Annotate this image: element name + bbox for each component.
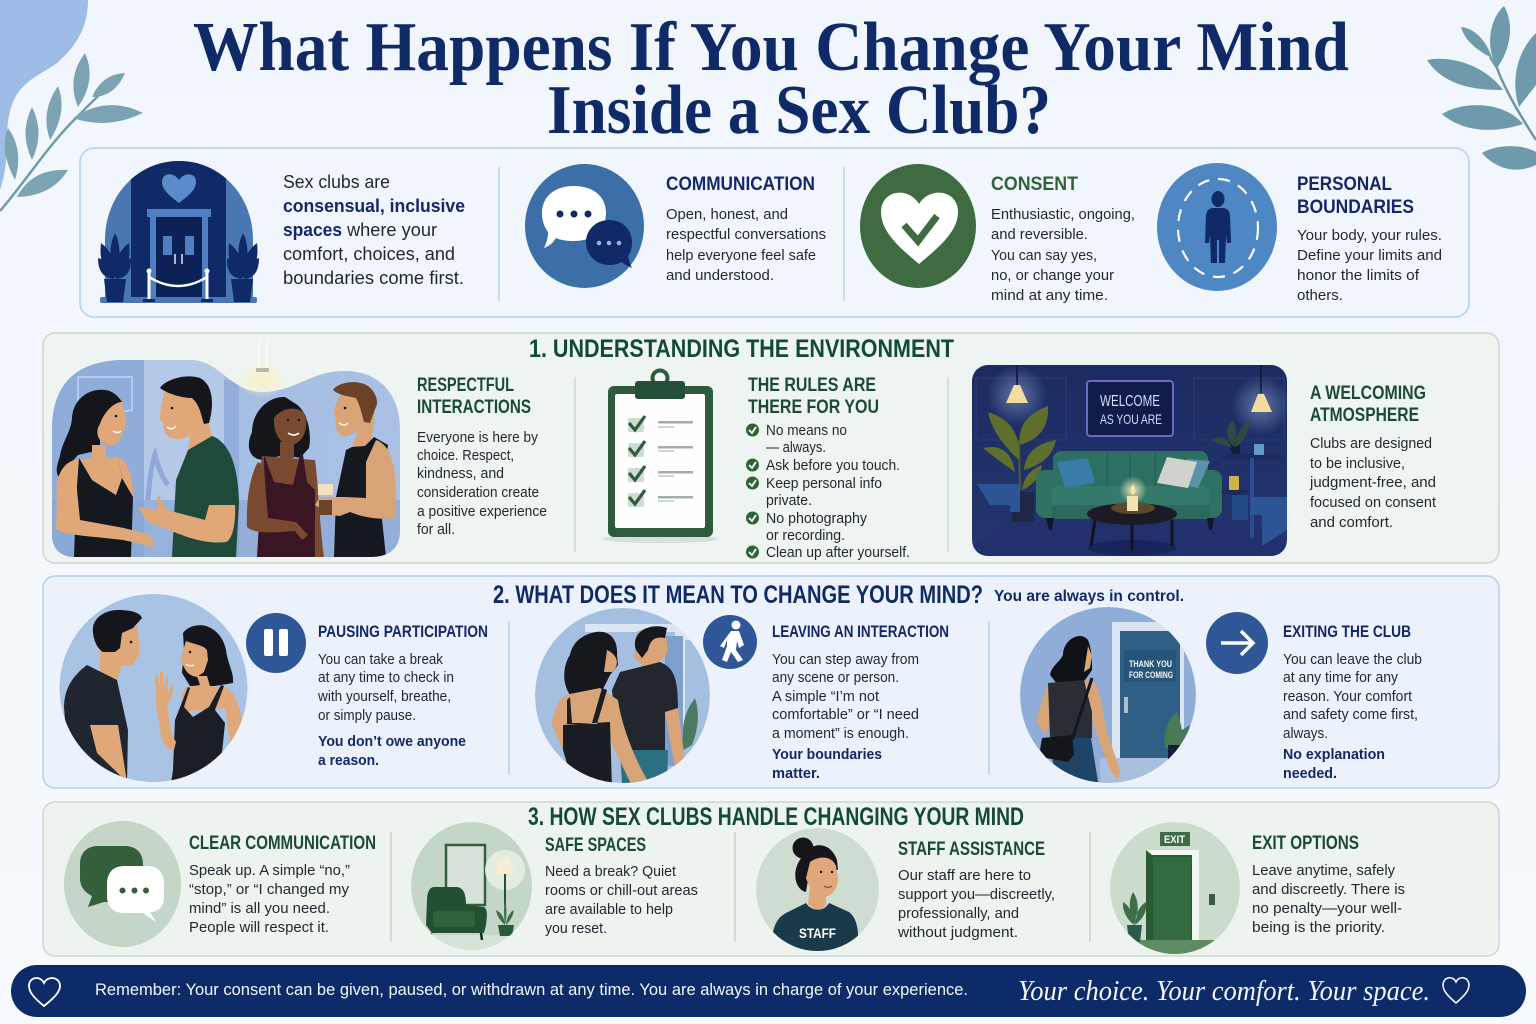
icon: heart left	[29, 978, 60, 1006]
text: the rules are there for you: Ask before you touch.	[766, 458, 900, 474]
text: personal boundaries: others.	[1297, 288, 1343, 304]
text: leaving an interaction	[772, 623, 949, 782]
leaf branch left	[0, 53, 143, 211]
text: staff assistance: professionally, and	[898, 906, 1019, 922]
text: communication: and understood.	[666, 268, 774, 284]
text: the rules are there for you: THE RULES ARE	[748, 374, 876, 396]
intro text: consensual, inclusive	[283, 195, 465, 216]
text: pausing participation: a reason.	[318, 753, 379, 769]
icon: walking person	[703, 615, 757, 669]
banner: reminder	[11, 965, 1526, 1017]
title: What Happens If You Change Your Mind	[193, 9, 1349, 86]
text: consent	[991, 173, 1135, 304]
illustration: exiting the club: FOR COMING	[1129, 670, 1173, 681]
chair left	[977, 484, 1020, 512]
illustration: leaving an interaction	[535, 608, 710, 790]
script tagline: Your choice. Your comfort. Your space.	[1018, 975, 1430, 1007]
woman right	[249, 397, 310, 460]
text: staff assistance: STAFF ASSISTANCE	[898, 838, 1045, 860]
text: pausing participation: You don’t owe anyone	[318, 734, 466, 750]
text: leaving an interaction: LEAVING AN INTERACTION	[772, 623, 949, 641]
table and candle	[1087, 476, 1177, 556]
text: communication: Open, honest, and	[666, 207, 788, 223]
illustration: pausing	[60, 594, 248, 790]
reminder text: Remember: Your consent can be given, paused, or withdrawn at any time. You are always in charge of your experience.	[95, 980, 968, 999]
text: exit options: and discreetly. There is	[1252, 882, 1405, 898]
text: clear communication: People will respect it.	[189, 920, 329, 936]
text: exiting the club: You can leave the club	[1283, 652, 1422, 668]
panel: section 1 understanding the environment	[43, 333, 1499, 563]
text: personal boundaries: Your body, your rules.	[1297, 228, 1442, 244]
text: respectful interactions: a positive experience	[417, 504, 547, 520]
text: personal boundaries: Define your limits and	[1297, 248, 1442, 264]
panel: introduction and key concepts	[80, 148, 1469, 317]
text: the rules are there for you: THERE FOR YOU	[748, 396, 879, 418]
text: the rules are there for you	[746, 374, 910, 561]
text: consent: mind at any time.	[991, 288, 1108, 304]
decorative blue blob top left	[0, 0, 88, 190]
text: leaving an interaction: comfortable” or “I need	[772, 707, 919, 723]
woman left	[57, 390, 122, 477]
icon: club entrance	[98, 161, 259, 303]
text: pausing participation	[317, 623, 488, 769]
text: leaving an interaction: You can step away from	[772, 652, 919, 668]
icon: heart right	[1443, 978, 1469, 1003]
text: leaving an interaction: any scene or person.	[772, 670, 899, 686]
text: safe spaces: Need a break? Quiet	[545, 864, 676, 880]
text: leaving an interaction: Your boundaries	[772, 747, 882, 763]
text: consent: no, or change your	[991, 268, 1114, 284]
text: personal boundaries	[1297, 173, 1442, 304]
illustration: welcoming lounge	[972, 365, 1291, 556]
illustration: exiting the club: THANK YOU	[1129, 659, 1172, 670]
icon: consent heart	[860, 164, 976, 288]
illustration: staff member	[756, 828, 879, 951]
text: a welcoming atmosphere: Clubs are designed	[1310, 436, 1432, 452]
icon: personal boundaries	[1157, 163, 1277, 291]
text: a welcoming atmosphere: to be inclusive,	[1310, 456, 1405, 472]
text: safe spaces: are available to help	[545, 902, 673, 918]
text: personal boundaries: honor the limits of	[1297, 268, 1420, 284]
text: exiting the club: and safety come first,	[1283, 707, 1418, 723]
heading: section 1: 1. UNDERSTANDING THE ENVIRONMENT	[529, 335, 954, 363]
text: respectful interactions: Everyone is here by	[417, 430, 539, 446]
illustration: exit door: EXIT	[1164, 834, 1185, 846]
text: a welcoming atmosphere: A WELCOMING	[1310, 382, 1426, 404]
icon: arrow	[1206, 612, 1268, 674]
text: personal boundaries: BOUNDARIES	[1297, 196, 1414, 218]
text: a welcoming atmosphere: focused on consent	[1310, 495, 1436, 511]
text: staff assistance: without judgment.	[897, 925, 1018, 941]
text: a welcoming atmosphere: judgment-free, and	[1309, 475, 1436, 491]
text: leaving an interaction: matter.	[772, 766, 820, 782]
text: exit options: no penalty—your well-	[1252, 901, 1402, 917]
text: clear communication	[189, 832, 376, 936]
text: the rules are there for you: No photography	[766, 511, 868, 527]
text: the rules are there for you: — always.	[766, 440, 826, 456]
text: staff assistance	[897, 838, 1055, 941]
text: a welcoming atmosphere	[1309, 382, 1436, 531]
text: respectful interactions: consideration create	[417, 485, 539, 501]
illustration: exit door	[1110, 822, 1242, 956]
text: pausing participation: PAUSING PARTICIPATION	[318, 623, 488, 641]
text: exit options: Leave anytime, safely	[1252, 863, 1396, 879]
sofa	[1036, 451, 1222, 530]
text: communication	[666, 173, 826, 284]
text: consent: and reversible.	[991, 227, 1088, 243]
icon: pause	[246, 613, 306, 673]
heading: section 2: You are always in control.	[994, 588, 1184, 605]
text: respectful interactions: RESPECTFUL	[417, 374, 514, 396]
text: a welcoming atmosphere: ATMOSPHERE	[1310, 404, 1419, 426]
sign	[1087, 381, 1173, 436]
text: exit options: EXIT OPTIONS	[1252, 832, 1359, 854]
text: the rules are there for you: private.	[766, 493, 812, 509]
text: respectful interactions: choice. Respect,	[417, 448, 514, 464]
intro text: comfort, choices, and	[283, 243, 455, 264]
plant left	[983, 406, 1056, 522]
pendant lamp	[237, 340, 287, 398]
text: a welcoming atmosphere: and comfort.	[1310, 515, 1393, 531]
icon: clipboard checklist	[602, 370, 718, 543]
text: staff assistance: Our staff are here to	[898, 868, 1031, 884]
text: leaving an interaction: a moment” is enough.	[772, 726, 909, 742]
text: consent: You can say yes,	[991, 248, 1097, 264]
text: the rules are there for you: Clean up after yourself.	[766, 545, 910, 561]
illustration: safe space room	[411, 822, 536, 955]
text: pausing participation: at any time to check in	[318, 670, 454, 686]
text: exit options: being is the priority.	[1252, 920, 1385, 936]
text: staff assistance: support you—discreetly,	[898, 887, 1055, 903]
title: Inside a Sex Club?	[547, 72, 1051, 149]
icon: communication	[525, 164, 644, 288]
intro text: where your	[346, 219, 437, 240]
text: clear communication: CLEAR COMMUNICATION	[189, 832, 376, 854]
heading: section 3: 3. HOW SEX CLUBS HANDLE CHANGING YOUR MIND	[528, 803, 1024, 831]
text: respectful interactions	[417, 374, 547, 538]
text: pausing participation: or simply pause.	[318, 708, 416, 724]
text: communication: help everyone feel safe	[666, 248, 816, 264]
text: consent: CONSENT	[991, 173, 1078, 195]
intro text: spaces	[283, 219, 342, 240]
text: respectful interactions: INTERACTIONS	[417, 396, 531, 418]
text: safe spaces	[545, 834, 698, 937]
sign: WELCOME	[1100, 393, 1160, 410]
text: the rules are there for you: or recording.	[766, 528, 845, 544]
text: exiting the club: reason. Your comfort	[1283, 689, 1412, 705]
text: respectful interactions: kindness, and	[417, 466, 504, 482]
sign: AS YOU ARE	[1100, 411, 1162, 427]
text: the rules are there for you: No means no	[766, 423, 847, 439]
text: clear communication: mind” is all you need.	[189, 901, 330, 917]
illustration: people talking	[52, 340, 402, 560]
text: consent: Enthusiastic, ongoing,	[991, 207, 1135, 223]
text: safe spaces: you reset.	[545, 921, 607, 937]
intro text	[283, 171, 465, 288]
text: exiting the club: at any time for any	[1283, 670, 1399, 686]
text: respectful interactions: for all.	[417, 522, 455, 538]
text: pausing participation: You can take a break	[318, 652, 444, 668]
text: clear communication: “stop,” or “I changed my	[189, 882, 350, 898]
text: communication: respectful conversations	[666, 227, 826, 243]
intro text: boundaries come first.	[283, 267, 464, 288]
text: clear communication: Speak up. A simple “no,”	[189, 863, 350, 879]
text: leaving an interaction: A simple “I’m not	[772, 689, 879, 705]
text: communication: COMMUNICATION	[666, 173, 815, 195]
man green shirt	[160, 391, 212, 450]
side table and plant right	[1212, 420, 1287, 546]
illustration: exiting the club	[1020, 607, 1200, 788]
text: safe spaces: rooms or chill-out areas	[545, 883, 698, 899]
text: the rules are there for you: Keep personal info	[766, 476, 882, 492]
text: exiting the club: EXITING THE CLUB	[1283, 623, 1411, 641]
text: exiting the club: No explanation	[1283, 747, 1385, 763]
man right	[334, 394, 375, 447]
text: exit options	[1252, 832, 1405, 936]
text: exiting the club: needed.	[1283, 766, 1337, 782]
illustration: staff member: STAFF	[799, 925, 836, 941]
text: safe spaces: SAFE SPACES	[545, 834, 646, 856]
heading: section 2: 2. WHAT DOES IT MEAN TO CHANGE YOUR MIND?	[493, 581, 983, 609]
text: pausing participation: with yourself, breathe,	[317, 689, 451, 705]
text: exiting the club	[1283, 623, 1422, 782]
text: exiting the club: always.	[1283, 726, 1328, 742]
panel: section 2 what does it mean to change your mind	[43, 576, 1499, 790]
icon: speech bubbles	[64, 821, 181, 947]
text: personal boundaries: PERSONAL	[1297, 173, 1392, 195]
intro text: Sex clubs are	[283, 171, 390, 192]
leaf branch right	[1427, 6, 1536, 170]
title	[193, 9, 1349, 149]
panel: section 3 how sex clubs handle changing your mind	[43, 802, 1499, 956]
